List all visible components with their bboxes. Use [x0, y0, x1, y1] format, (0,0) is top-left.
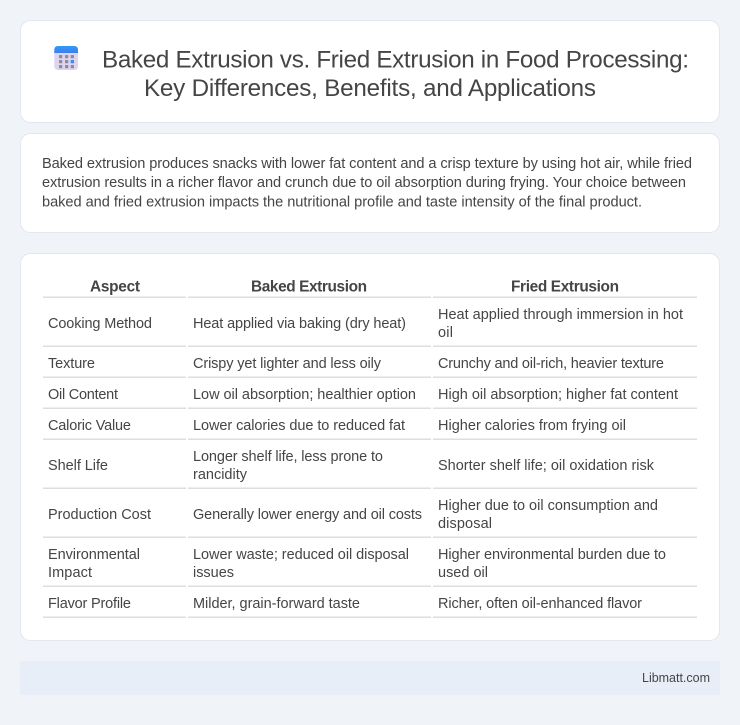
- row: oil content: High oil absorption; higher fat content: [438, 387, 678, 403]
- table header row: Fried Extrusion: [511, 278, 619, 296]
- row: shelf life: Shorter shelf life; oil oxidation risk: [438, 458, 655, 474]
- intro text block: baked and fried extrusion impacts the nutritional profile and taste intensity of the final product.: [42, 194, 642, 210]
- row: environmental impact: issues: [193, 565, 234, 581]
- panel: comparison table: [20, 254, 720, 640]
- row: caloric value: Caloric Value: [48, 418, 131, 434]
- row: production cost: [43, 498, 697, 537]
- title: [102, 46, 689, 102]
- row: cooking method: Heat applied through immersion in hot: [438, 307, 683, 323]
- title: Key Differences, Benefits, and Applications: [144, 75, 596, 102]
- row: caloric value: Lower calories due to reduced fat: [193, 418, 405, 434]
- row: environmental impact: Impact: [48, 565, 92, 581]
- row: flavor profile: [43, 596, 697, 617]
- panel: title header: [20, 20, 720, 122]
- row: flavor profile: Flavor Profile: [48, 596, 131, 612]
- footer: [20, 661, 720, 695]
- title: Baked Extrusion vs. Fried Extrusion in Food Processing:: [102, 46, 689, 74]
- table header row: [43, 278, 697, 297]
- row: environmental impact: Environmental: [48, 547, 140, 563]
- row: environmental impact: Lower waste; reduced oil disposal: [193, 547, 409, 563]
- row: production cost: Higher due to oil consumption and: [438, 498, 658, 514]
- row: oil content: [43, 387, 697, 408]
- row: caloric value: Higher calories from frying oil: [438, 418, 626, 434]
- row: flavor profile: Richer, often oil-enhanced flavor: [438, 596, 642, 612]
- row: texture: Crunchy and oil-rich, heavier texture: [438, 356, 664, 372]
- row: shelf life: [43, 449, 697, 488]
- row: shelf life: rancidity: [193, 467, 248, 483]
- row: environmental impact: used oil: [438, 565, 488, 581]
- row: texture: Texture: [48, 356, 95, 372]
- row: environmental impact: [43, 547, 697, 586]
- intro text block: [42, 156, 692, 210]
- row: caloric value: [43, 418, 697, 439]
- row: cooking method: oil: [438, 325, 453, 341]
- row: flavor profile: Milder, grain-forward taste: [193, 596, 360, 612]
- row: cooking method: [43, 307, 697, 346]
- row: shelf life: Shelf Life: [48, 458, 108, 474]
- intro text block: extrusion results in a richer flavor and crunch due to oil absorption during frying. Your choice between: [42, 175, 686, 191]
- table header row: Baked Extrusion: [251, 278, 367, 296]
- row: cooking method: Cooking Method: [48, 316, 152, 332]
- row: oil content: Low oil absorption; healthier option: [193, 387, 416, 403]
- row: production cost: Production Cost: [48, 507, 151, 523]
- icon: calendar: [54, 46, 78, 70]
- intro text block: Baked extrusion produces snacks with lower fat content and a crisp texture by using hot air, while fried: [42, 156, 692, 172]
- row: texture: [43, 356, 697, 377]
- row: production cost: disposal: [438, 516, 492, 532]
- row: cooking method: Heat applied via baking (dry heat): [193, 316, 406, 332]
- row: environmental impact: Higher environmental burden due to: [438, 547, 666, 563]
- table header row: Aspect: [90, 278, 140, 296]
- row: oil content: Oil Content: [48, 387, 118, 403]
- row: texture: Crispy yet lighter and less oily: [193, 356, 382, 372]
- row: shelf life: Longer shelf life, less prone to: [193, 449, 383, 465]
- footer: Libmatt.com: [642, 671, 710, 685]
- row: production cost: Generally lower energy and oil costs: [193, 507, 422, 523]
- panel: introduction: [20, 134, 720, 232]
